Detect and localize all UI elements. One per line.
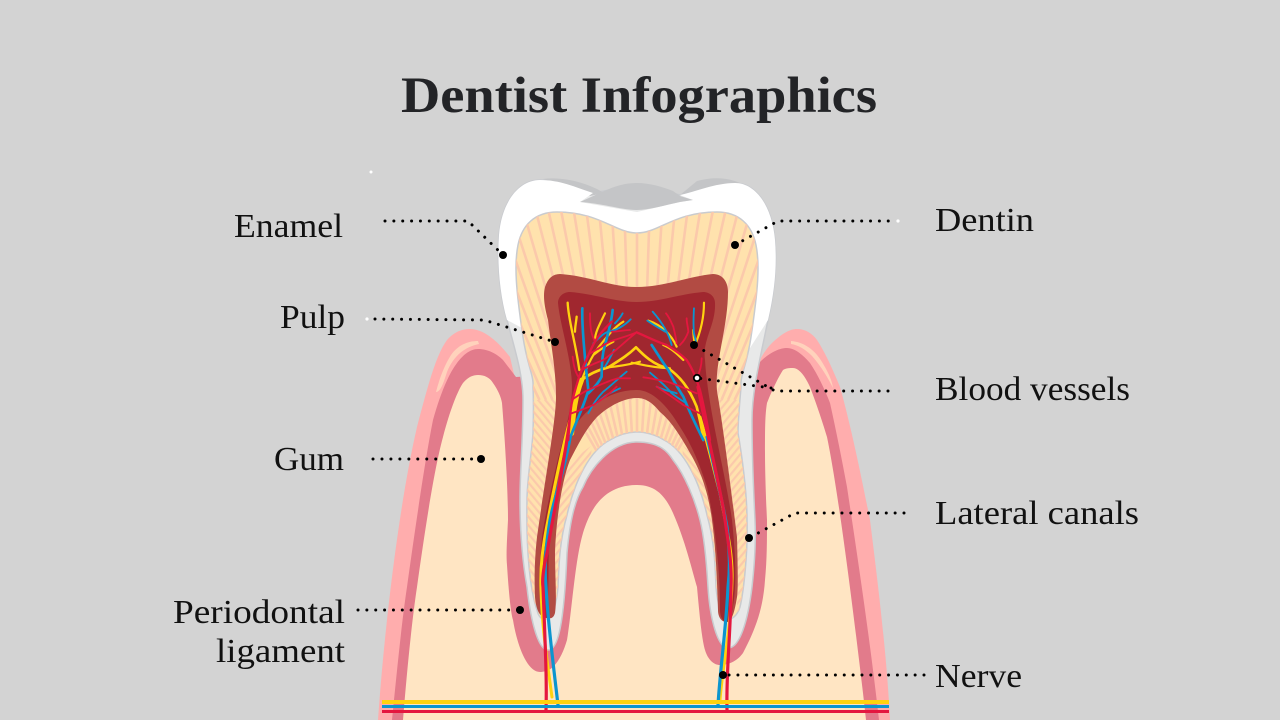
tooth and gum diagram — [378, 178, 890, 720]
label: Nerve: Nerve — [935, 658, 1022, 695]
callout: nerve — [719, 671, 924, 679]
occlusal surface — [580, 183, 693, 210]
label: Lateral canals: Lateral canals — [935, 495, 1139, 532]
label: Periodontal ligament: Periodontal — [173, 594, 345, 631]
callout: gum — [373, 455, 485, 463]
label: Pulp: Pulp — [280, 299, 345, 336]
callout: lateral canals — [745, 513, 904, 542]
enamel — [498, 180, 776, 348]
gum outer layer — [378, 329, 890, 720]
callout: pulp — [365, 317, 559, 346]
callout: blood vessels — [690, 341, 888, 391]
callout: dentin — [731, 219, 900, 249]
label: Gum: Gum — [274, 441, 344, 478]
nerve stems and blood vessels — [541, 303, 732, 710]
crown shadow slivers — [543, 178, 752, 196]
label: Periodontal ligament: ligament — [216, 633, 346, 670]
dentin tubules — [516, 212, 758, 619]
root vessels — [541, 417, 732, 700]
gum inner layer — [392, 348, 879, 720]
label: Dentin: Dentin — [935, 202, 1034, 239]
label: Periodontal ligament — [173, 594, 346, 670]
label: Blood vessels: Blood vessels — [935, 371, 1130, 408]
horizontal nerve bundle — [382, 700, 889, 713]
callout: periodontal ligament — [358, 606, 524, 614]
pulp inner — [540, 292, 735, 622]
title: Dentist Infographics — [401, 68, 877, 124]
callout: enamel — [370, 170, 507, 259]
tooth root cementum — [498, 180, 776, 650]
gum highlight right — [791, 341, 833, 388]
gum highlight left — [436, 341, 479, 392]
pulp outer — [535, 274, 738, 622]
dentin — [516, 212, 758, 619]
jaw bone — [403, 368, 866, 720]
crown vessels — [568, 303, 710, 440]
label: Enamel: Enamel — [234, 208, 343, 245]
